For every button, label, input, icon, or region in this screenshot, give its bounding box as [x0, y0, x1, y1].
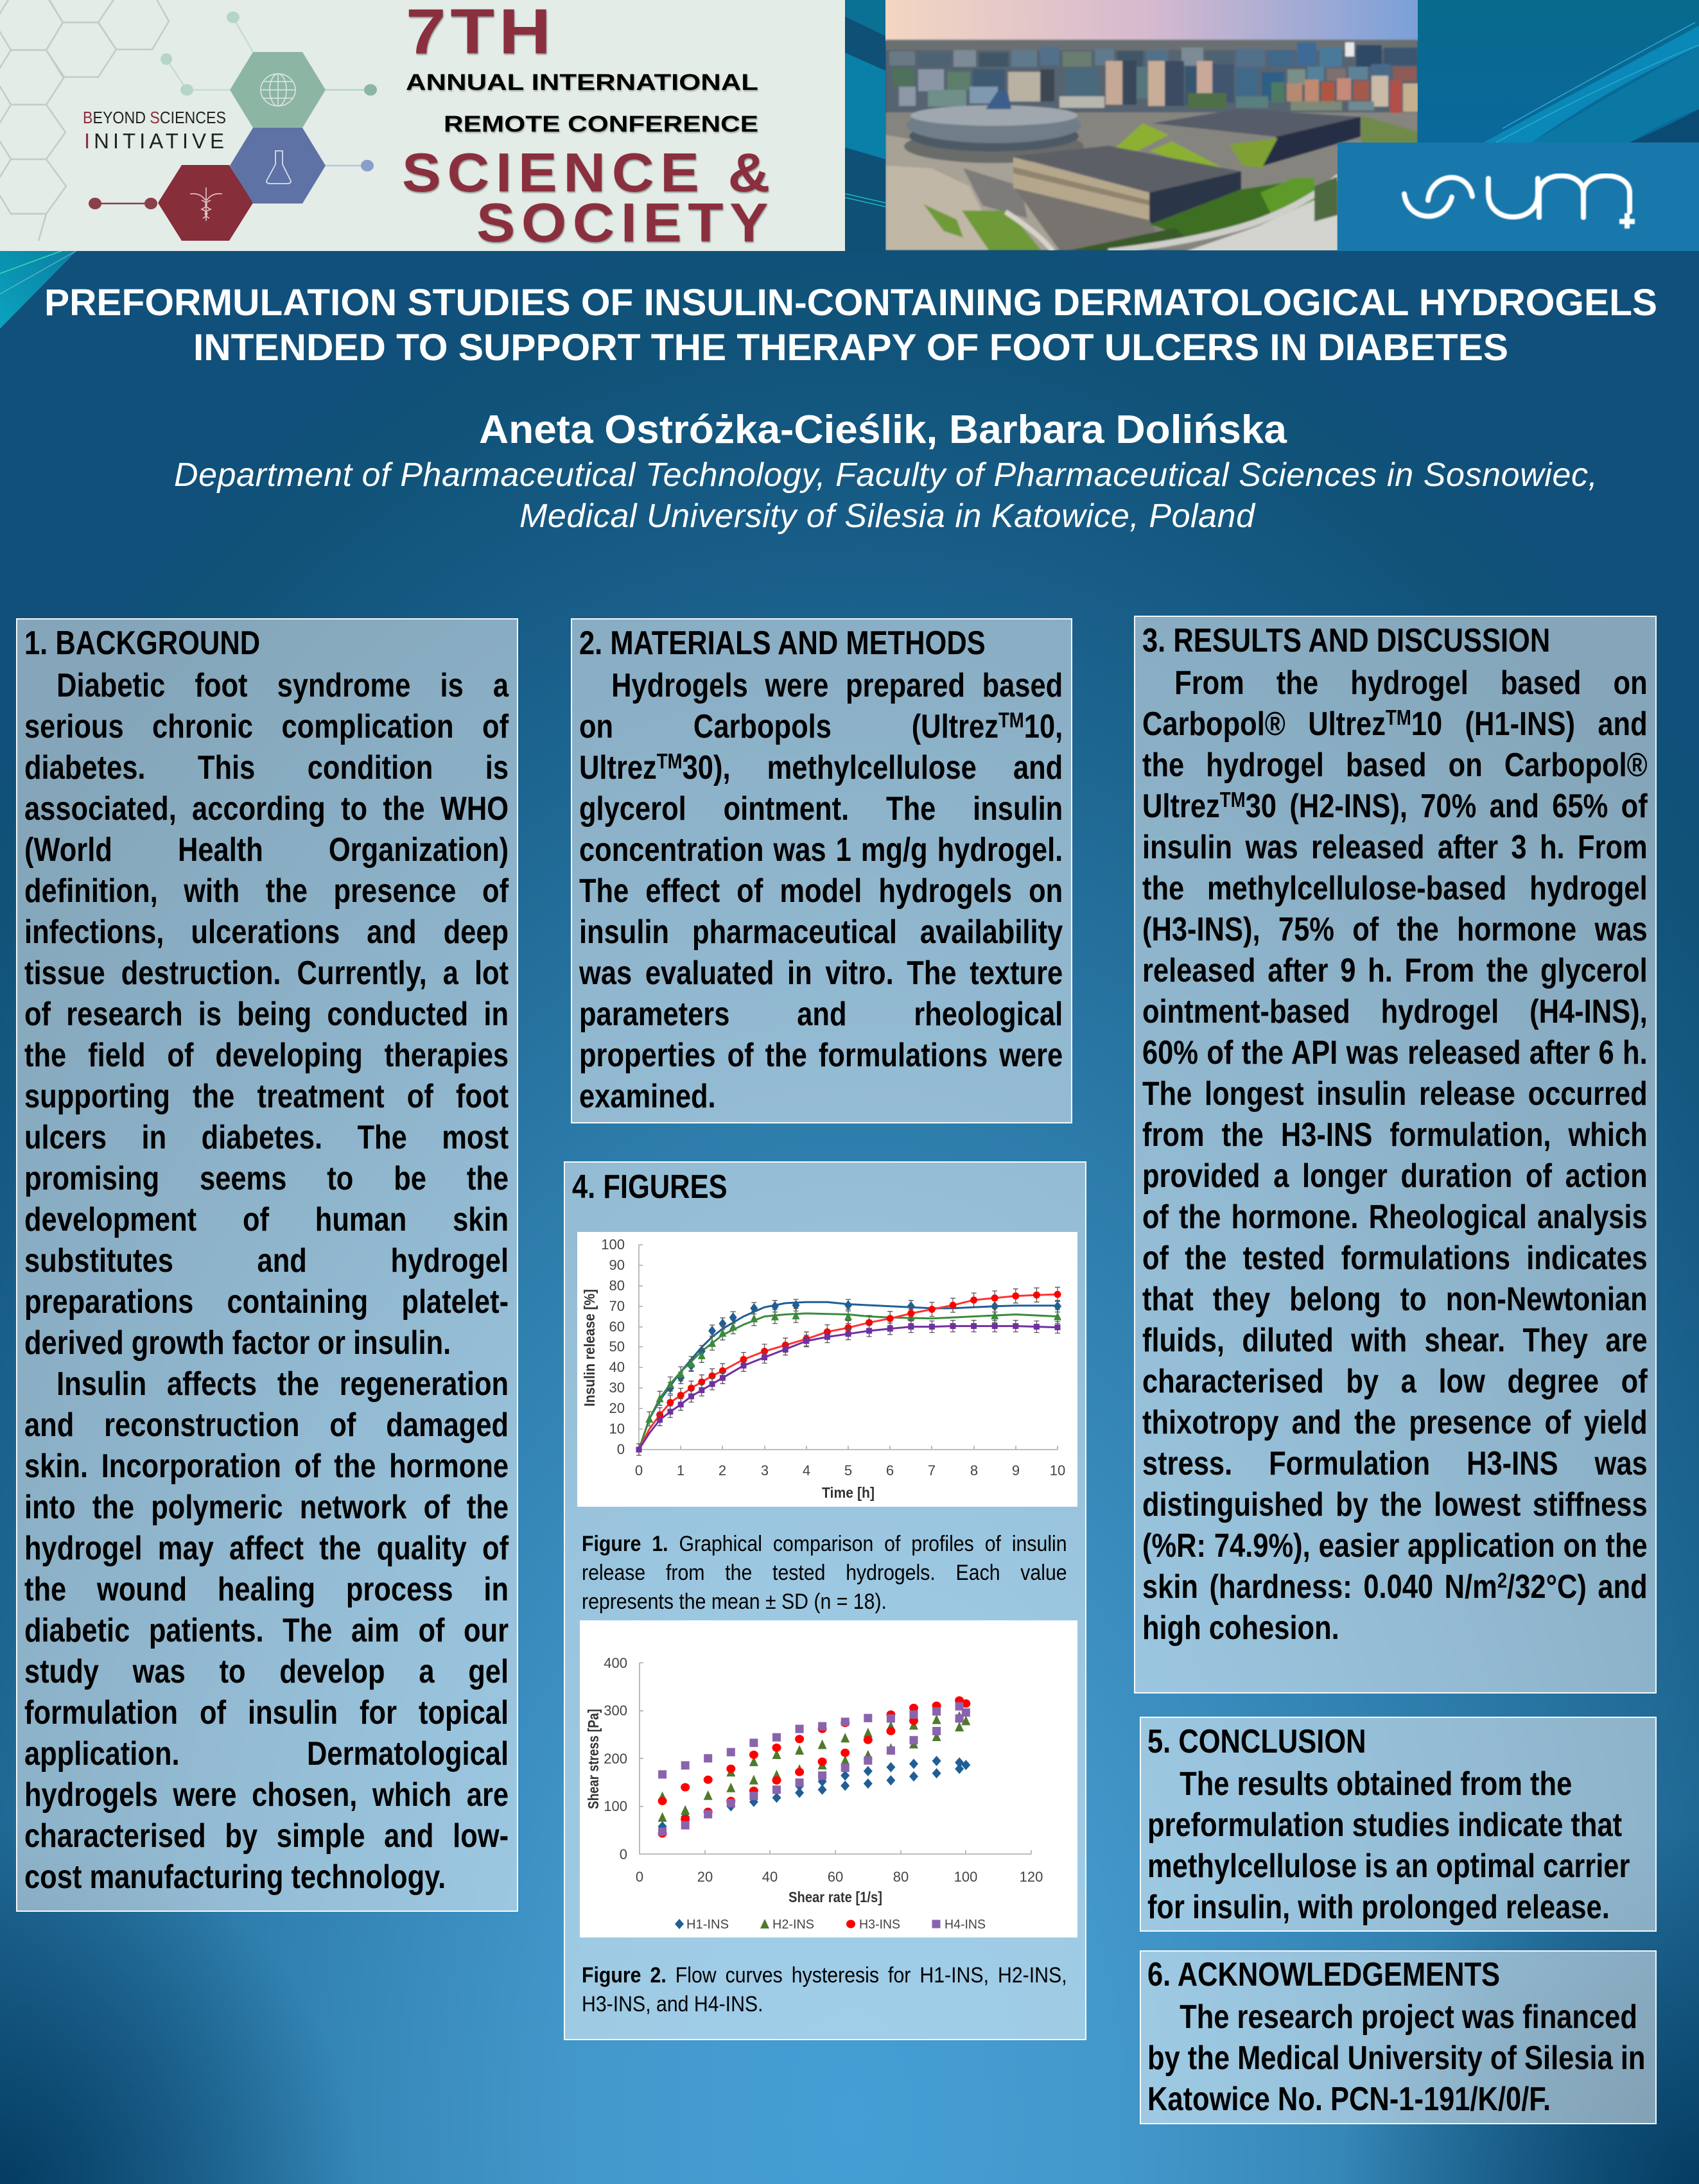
y tick labels: 90: [609, 1257, 625, 1273]
x tick labels: 1: [677, 1462, 684, 1478]
background text: of research is being conducted in: [24, 996, 509, 1033]
x tick labels: 100: [954, 1869, 977, 1885]
decorative swoosh: top right: [1418, 0, 1699, 143]
hexagon: globe: [230, 52, 326, 128]
hexagon: flask: [230, 128, 326, 204]
figures heading: 4. FIGURES: [572, 1168, 728, 1206]
y tick labels: [601, 1236, 625, 1457]
organiser name: BEYOND SCIENCES: [83, 108, 226, 127]
chart: insulin release profiles: [577, 1232, 1077, 1507]
x tick labels: 20: [697, 1869, 713, 1885]
affiliation: [174, 456, 1598, 535]
caption: figure 1: release from the tested hydrogels. Each value: [582, 1561, 1067, 1585]
axis titles: [581, 1289, 875, 1501]
exhibition hall far: [1152, 109, 1361, 137]
affiliation: Medical University of Silesia in Katowice, Poland: [519, 498, 1256, 535]
x tick labels: 80: [893, 1869, 909, 1885]
conclusion text: 5. CONCLUSION: [1147, 1723, 1366, 1760]
conclusion text: preformulation studies indicate that: [1147, 1807, 1622, 1844]
organiser name: [83, 108, 226, 153]
axes: [639, 1245, 1058, 1450]
results text: from the H3-INS formulation, which: [1142, 1116, 1648, 1154]
methods text: glycerol ointment. The insulin: [579, 790, 1063, 828]
conclusion text: [1147, 1723, 1630, 1926]
background text: application. Dermatological: [24, 1735, 509, 1772]
data markers: [658, 1696, 970, 1837]
axis titles: Shear stress [Pa]: [585, 1709, 602, 1809]
results text: From the hydrogel based on: [1174, 664, 1648, 702]
y tick labels: 40: [609, 1359, 625, 1375]
y tick labels: 80: [609, 1278, 625, 1294]
x tick labels: 0: [636, 1869, 643, 1885]
methods text: properties of the formulations were: [579, 1037, 1063, 1074]
acknowledgements text: [1147, 1956, 1645, 2118]
methods text: examined.: [579, 1078, 716, 1115]
results text: characterised by a low degree of: [1142, 1363, 1648, 1400]
conference banner: [0, 0, 845, 254]
background text: hydrogel may affect the quality of: [24, 1530, 509, 1567]
background text: skin. Incorporation of the hormone: [24, 1448, 509, 1485]
results text: Carbopol® UltrezTM10 (H1-INS) and: [1142, 706, 1648, 743]
background text: substitutes and hydrogel: [24, 1242, 509, 1279]
results text: that they belong to non-Newtonian: [1142, 1281, 1648, 1318]
results text: of the tested formulations indicates: [1142, 1240, 1648, 1277]
x tick labels: 8: [970, 1462, 978, 1478]
legend: H3-INS: [859, 1918, 900, 1932]
results text: ointment-based hydrogel (H4-INS),: [1142, 993, 1648, 1030]
background text: ulcers in diabetes. The most: [24, 1119, 509, 1156]
x tick labels: 7: [928, 1462, 936, 1478]
distant city: [889, 42, 1417, 105]
x tick labels: 60: [828, 1869, 843, 1885]
x tick labels: 10: [1050, 1462, 1065, 1478]
authors: Aneta Ostróżka-Cieślik, Barbara Dolińska: [479, 408, 1287, 452]
legend: H4-INS: [945, 1918, 986, 1932]
results text: distinguished by the lowest stiffness: [1142, 1486, 1648, 1523]
background text: development of human skin: [24, 1201, 509, 1238]
x tick labels: 4: [803, 1462, 810, 1478]
results text: the methylcellulose-based hydrogel: [1142, 870, 1648, 907]
conference title: SCIENCE &: [402, 143, 776, 204]
acknowledgements text: Katowice No. PCN-1-191/K/0/F.: [1147, 2081, 1551, 2118]
chart: flow curves hysteresis: [580, 1620, 1077, 1937]
background text: preparations containing platelet-: [24, 1283, 509, 1321]
background text: characterised by simple and low-: [24, 1817, 509, 1855]
background text: 1. BACKGROUND: [24, 625, 260, 662]
y tick labels: 50: [609, 1339, 625, 1355]
y tick labels: 0: [617, 1441, 625, 1457]
hexagon pattern: [0, 0, 169, 241]
results text: provided a longer duration of action: [1142, 1157, 1648, 1195]
background text: infections, ulcerations and deep: [24, 914, 509, 951]
x tick labels: 120: [1020, 1869, 1043, 1885]
results text: (%R: 74.9%), easier application on the: [1142, 1527, 1648, 1564]
background text: serious chronic complication of: [24, 708, 509, 745]
caption: figure 2: H3-INS, and H4-INS.: [582, 1992, 763, 2016]
y tick labels: 60: [609, 1319, 625, 1335]
background text: [24, 625, 509, 1896]
results text: high cohesion.: [1142, 1609, 1339, 1647]
background text: tissue destruction. Currently, a lot: [24, 955, 509, 992]
conference title: [402, 0, 776, 254]
methods text: concentration was 1 mg/g hydrogel.: [579, 831, 1063, 869]
molecule connectors: [95, 17, 370, 204]
background text: hydrogels were chosen, which are: [24, 1776, 509, 1814]
panel: background: [16, 618, 518, 1912]
legend: H2-INS: [772, 1918, 814, 1932]
near city: [899, 61, 1418, 113]
methods text: 2. MATERIALS AND METHODS: [579, 625, 986, 662]
axes: [640, 1663, 1031, 1854]
methods text: [579, 625, 1063, 1115]
axis titles: Insulin release [%]: [581, 1289, 598, 1407]
photo: aerial view of Katowice: [884, 0, 1418, 252]
y tick labels: 200: [604, 1751, 627, 1767]
results text: insulin was released after 3 h. From: [1142, 829, 1648, 866]
background text: the wound healing process in: [24, 1571, 509, 1608]
affiliation: Department of Pharmaceutical Technology, Faculty of Pharmaceutical Sciences in Sosnowiec,: [174, 456, 1598, 494]
university logo box: [1337, 143, 1699, 251]
legend: H1-INS: [686, 1918, 729, 1932]
conclusion text: The results obtained from the: [1180, 1765, 1572, 1803]
acknowledgements text: The research project was financed: [1180, 1998, 1637, 2036]
axis titles: Time [h]: [822, 1484, 875, 1501]
poster title: PREFORMULATION STUDIES OF INSULIN-CONTAINING DERMATOLOGICAL HYDROGELS: [44, 282, 1657, 324]
caption: figure 1: Figure 1. Graphical comparison of profiles of insulin: [582, 1532, 1067, 1556]
y tick labels: 0: [620, 1846, 627, 1862]
methods text: The effect of model hydrogels on: [579, 872, 1063, 910]
methods text: Hydrogels were prepared based: [611, 667, 1063, 704]
y tick labels: 20: [609, 1400, 625, 1416]
x tick labels: 3: [761, 1462, 769, 1478]
panel: results and discussion: [1134, 616, 1657, 1694]
y tick labels: 100: [601, 1236, 625, 1252]
x tick labels: [635, 1462, 1065, 1478]
background text: derived growth factor or insulin.: [24, 1324, 451, 1362]
panel: figures: [564, 1161, 1086, 2040]
results text: [1142, 622, 1648, 1647]
lawns and roads: [1015, 188, 1156, 250]
background text: definition, with the presence of: [24, 872, 509, 910]
x tick labels: 9: [1012, 1462, 1020, 1478]
axis titles: [585, 1709, 882, 1905]
results text: stress. Formulation H3-INS was: [1142, 1445, 1648, 1482]
results text: (H3-INS), 75% of the hormone was: [1142, 911, 1648, 948]
background text: cost manufacturing technology.: [24, 1859, 446, 1896]
results text: 60% of the API was released after 6 h.: [1142, 1034, 1648, 1071]
methods text: was evaluated in vitro. The texture: [579, 955, 1063, 992]
axis titles: Shear rate [1/s]: [789, 1889, 882, 1905]
y tick labels: 30: [609, 1380, 625, 1396]
organiser name: INITIATIVE: [84, 129, 224, 153]
background text: the field of developing therapies: [24, 1037, 509, 1074]
pavement around the arena: [885, 135, 1059, 250]
x tick labels: 5: [844, 1462, 852, 1478]
results text: skin (hardness: 0.040 N/m2/32°C) and: [1142, 1568, 1648, 1606]
caption: figure 2: [582, 1963, 1067, 2016]
arena: [903, 139, 1084, 164]
curves and markers: [636, 1287, 1061, 1455]
conclusion text: for insulin, with prolonged release.: [1147, 1889, 1610, 1926]
y tick labels: 300: [604, 1703, 627, 1719]
background text: diabetes. This condition is: [24, 749, 509, 786]
panel: conclusion: [1140, 1717, 1657, 1932]
background text: Insulin affects the regeneration: [57, 1365, 509, 1403]
results text: UltrezTM30 (H2-INS), 70% and 65% of: [1142, 788, 1648, 825]
caption: figure 2: Figure 2. Flow curves hysteresis for H1-INS, H2-INS,: [582, 1963, 1067, 1988]
conclusion text: methylcellulose is an optimal carrier: [1147, 1848, 1630, 1885]
poster title: INTENDED TO SUPPORT THE THERAPY OF FOOT ULCERS IN DIABETES: [193, 327, 1508, 368]
background text: supporting the treatment of foot: [24, 1078, 509, 1115]
y tick labels: 400: [604, 1655, 627, 1671]
results text: thixotropy and the presence of yield: [1142, 1404, 1648, 1441]
background text: and reconstruction of damaged: [24, 1407, 509, 1444]
caption: figure 1: [582, 1532, 1067, 1614]
results text: of the hormone. Rheological analysis: [1142, 1199, 1648, 1236]
y tick labels: 70: [609, 1298, 625, 1314]
background text: associated, according to the WHO: [24, 790, 509, 828]
results text: the hydrogel based on Carbopol®: [1142, 747, 1648, 784]
background text: formulation of insulin for topical: [24, 1694, 509, 1731]
exhibition hall near: [1013, 146, 1241, 193]
background text: (World Health Organization): [24, 831, 509, 869]
results text: 3. RESULTS AND DISCUSSION: [1142, 622, 1550, 659]
background text: Diabetic foot syndrome is a: [57, 667, 509, 704]
decorative swoosh: corner under banner: [0, 249, 78, 329]
results text: The longest insulin release occurred: [1142, 1075, 1648, 1113]
poster title: [44, 282, 1657, 368]
conference title: ANNUAL INTERNATIONAL: [406, 70, 758, 95]
panel: materials and methods: [571, 618, 1072, 1123]
background text: into the polymeric network of the: [24, 1489, 509, 1526]
acknowledgements text: 6. ACKNOWLEDGEMENTS: [1147, 1956, 1500, 1993]
methods text: insulin pharmaceutical availability: [579, 914, 1063, 951]
methods text: on Carbopols (UltrezTM10,: [579, 708, 1063, 745]
hexagon: caduceus: [158, 165, 253, 241]
y tick labels: [604, 1655, 627, 1862]
x tick labels: 0: [635, 1462, 643, 1478]
background text: study was to develop a gel: [24, 1653, 509, 1690]
x tick labels: 40: [762, 1869, 778, 1885]
y tick labels: 100: [604, 1798, 627, 1814]
methods text: parameters and rheological: [579, 996, 1063, 1033]
panel: acknowledgements: [1140, 1950, 1657, 2124]
results text: released after 9 h. From the glycerol: [1142, 952, 1648, 989]
legend: [675, 1918, 986, 1932]
acknowledgements text: by the Medical University of Silesia in: [1147, 2040, 1645, 2077]
background text: promising seems to be the: [24, 1160, 509, 1197]
caption: figure 1: represents the mean ± SD (n = 18).: [582, 1590, 887, 1614]
background text: diabetic patients. The aim of our: [24, 1612, 509, 1649]
methods text: UltrezTM30), methylcellulose and: [579, 749, 1063, 786]
y tick labels: 10: [609, 1421, 625, 1437]
x tick labels: 6: [886, 1462, 894, 1478]
x tick labels: 2: [719, 1462, 726, 1478]
results text: fluids, diluted with shear. They are: [1142, 1322, 1648, 1359]
x tick labels: [636, 1869, 1043, 1885]
conference title: SOCIETY: [476, 193, 774, 254]
conference title: REMOTE CONFERENCE: [444, 112, 758, 137]
decorative swoosh: strip between banner and photo: [835, 0, 885, 252]
